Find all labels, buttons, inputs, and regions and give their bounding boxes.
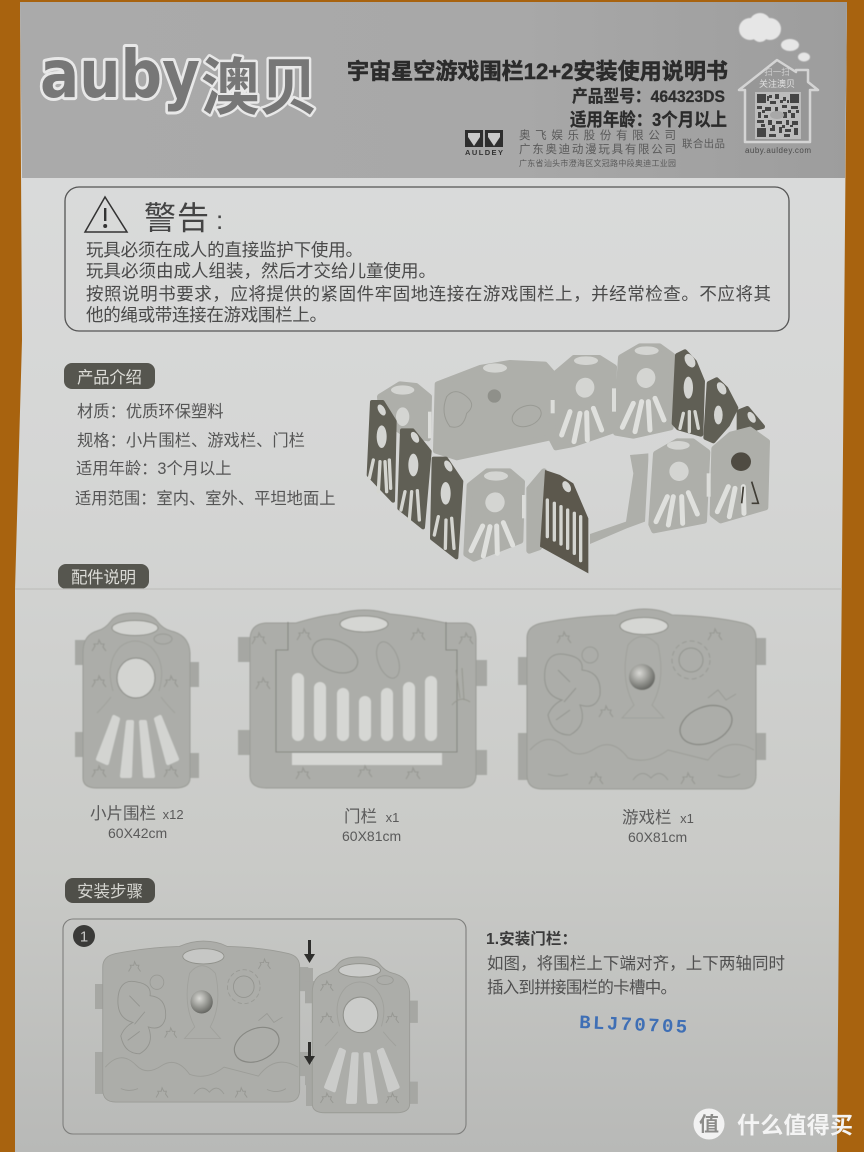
Auldey logo: AULDEY xyxy=(465,148,503,157)
company names xyxy=(519,128,725,168)
part: play panel xyxy=(518,609,766,789)
watermark xyxy=(694,1108,853,1140)
caption: gate: 60X81cm xyxy=(342,828,401,844)
icon: warning triangle xyxy=(85,197,127,232)
warning text xyxy=(86,240,771,325)
step 1 text xyxy=(486,930,785,997)
Auldey logo xyxy=(465,130,503,157)
heading: steps xyxy=(65,878,155,903)
caption: small fence xyxy=(90,804,184,841)
arrow: top xyxy=(304,940,315,963)
caption: play panel xyxy=(622,808,694,845)
QR house xyxy=(739,13,818,155)
model number: 产品型号：464323DS xyxy=(572,87,725,106)
company names: 联合出品 xyxy=(682,137,725,150)
warning heading: 警告 xyxy=(144,200,209,236)
step 1 text: 插入到拼接围栏的卡槽中。 xyxy=(487,978,677,997)
logo: auby 澳贝: auby xyxy=(40,36,200,113)
caption: small fence: 60X42cm xyxy=(108,825,167,841)
product title: 宇宙星空游戏围栏12+2安装使用说明书 xyxy=(347,59,728,84)
company names: 奥飞娱乐股份有限公司 xyxy=(519,128,676,142)
warning text: 他的绳或带连接在游戏围栏上。 xyxy=(86,305,327,325)
age range: 适用年龄：3个月以上 xyxy=(570,109,727,130)
step number: 1 xyxy=(80,928,88,946)
caption: gate: 门栏 x1 xyxy=(344,807,399,826)
heading: parts: 配件说明 xyxy=(71,568,136,587)
header band xyxy=(20,2,847,178)
warning text: 玩具必须由成人组装，然后才交给儿童使用。 xyxy=(86,261,436,281)
panel: step 1 xyxy=(63,919,466,1134)
caption: play panel: 60X81cm xyxy=(628,829,687,845)
logo: auby 澳贝: 澳贝 xyxy=(201,54,318,123)
panel: warning xyxy=(65,187,789,331)
caption: small fence: 小片围栏 x12 xyxy=(90,804,184,823)
heading: steps: 安装步骤 xyxy=(77,882,143,901)
company names: 广东省汕头市澄海区文冠路中段奥迪工业园 xyxy=(519,158,676,168)
watermark: 什么值得买 xyxy=(737,1112,853,1138)
QR house: 关注澳贝 xyxy=(759,78,795,89)
logo: auby 澳贝 xyxy=(40,36,318,123)
batch stamp: BLJ70705 xyxy=(579,1012,688,1039)
part: small fence panel xyxy=(75,613,199,788)
watermark: 值 xyxy=(699,1113,719,1136)
step play panel xyxy=(95,941,308,1102)
product details: 规格：小片围栏、游戏栏、门栏 xyxy=(77,432,305,450)
product details: 材质：优质环保塑料 xyxy=(77,403,224,421)
heading: product intro: 产品介绍 xyxy=(77,368,142,387)
product illustration: assembled playpen xyxy=(369,346,767,573)
QR house: 扫一扫 xyxy=(764,67,790,77)
arrow: bottom xyxy=(304,1042,315,1065)
QR house: auby.auldey.com xyxy=(745,146,811,155)
heading: parts xyxy=(58,564,149,589)
product details xyxy=(75,403,336,508)
heading: product intro xyxy=(64,363,155,389)
product details: 适用范围：室内、室外、平坦地面上 xyxy=(75,490,336,508)
caption: gate xyxy=(342,807,401,844)
caption: play panel: 游戏栏 x1 xyxy=(622,808,694,827)
connector tabs xyxy=(305,968,314,1106)
company names: 广东奥迪动漫玩具有限公司 xyxy=(519,142,676,156)
warning text: 按照说明书要求，应将提供的紧固件牢固地连接在游戏围栏上，并经常检查。不应将其 xyxy=(86,284,771,304)
paper fold line xyxy=(15,588,842,590)
step number xyxy=(73,925,95,947)
step 1 text: 1.安装门栏： xyxy=(486,930,577,948)
product details: 适用年龄：3个月以上 xyxy=(76,460,232,478)
part: gate panel xyxy=(238,610,487,788)
warning text: 玩具必须在成人的直接监护下使用。 xyxy=(86,240,363,260)
step 1 text: 如图，将围栏上下端对齐，上下两轴同时 xyxy=(487,954,785,973)
warning heading: : xyxy=(216,205,223,235)
step small panel xyxy=(305,957,418,1113)
